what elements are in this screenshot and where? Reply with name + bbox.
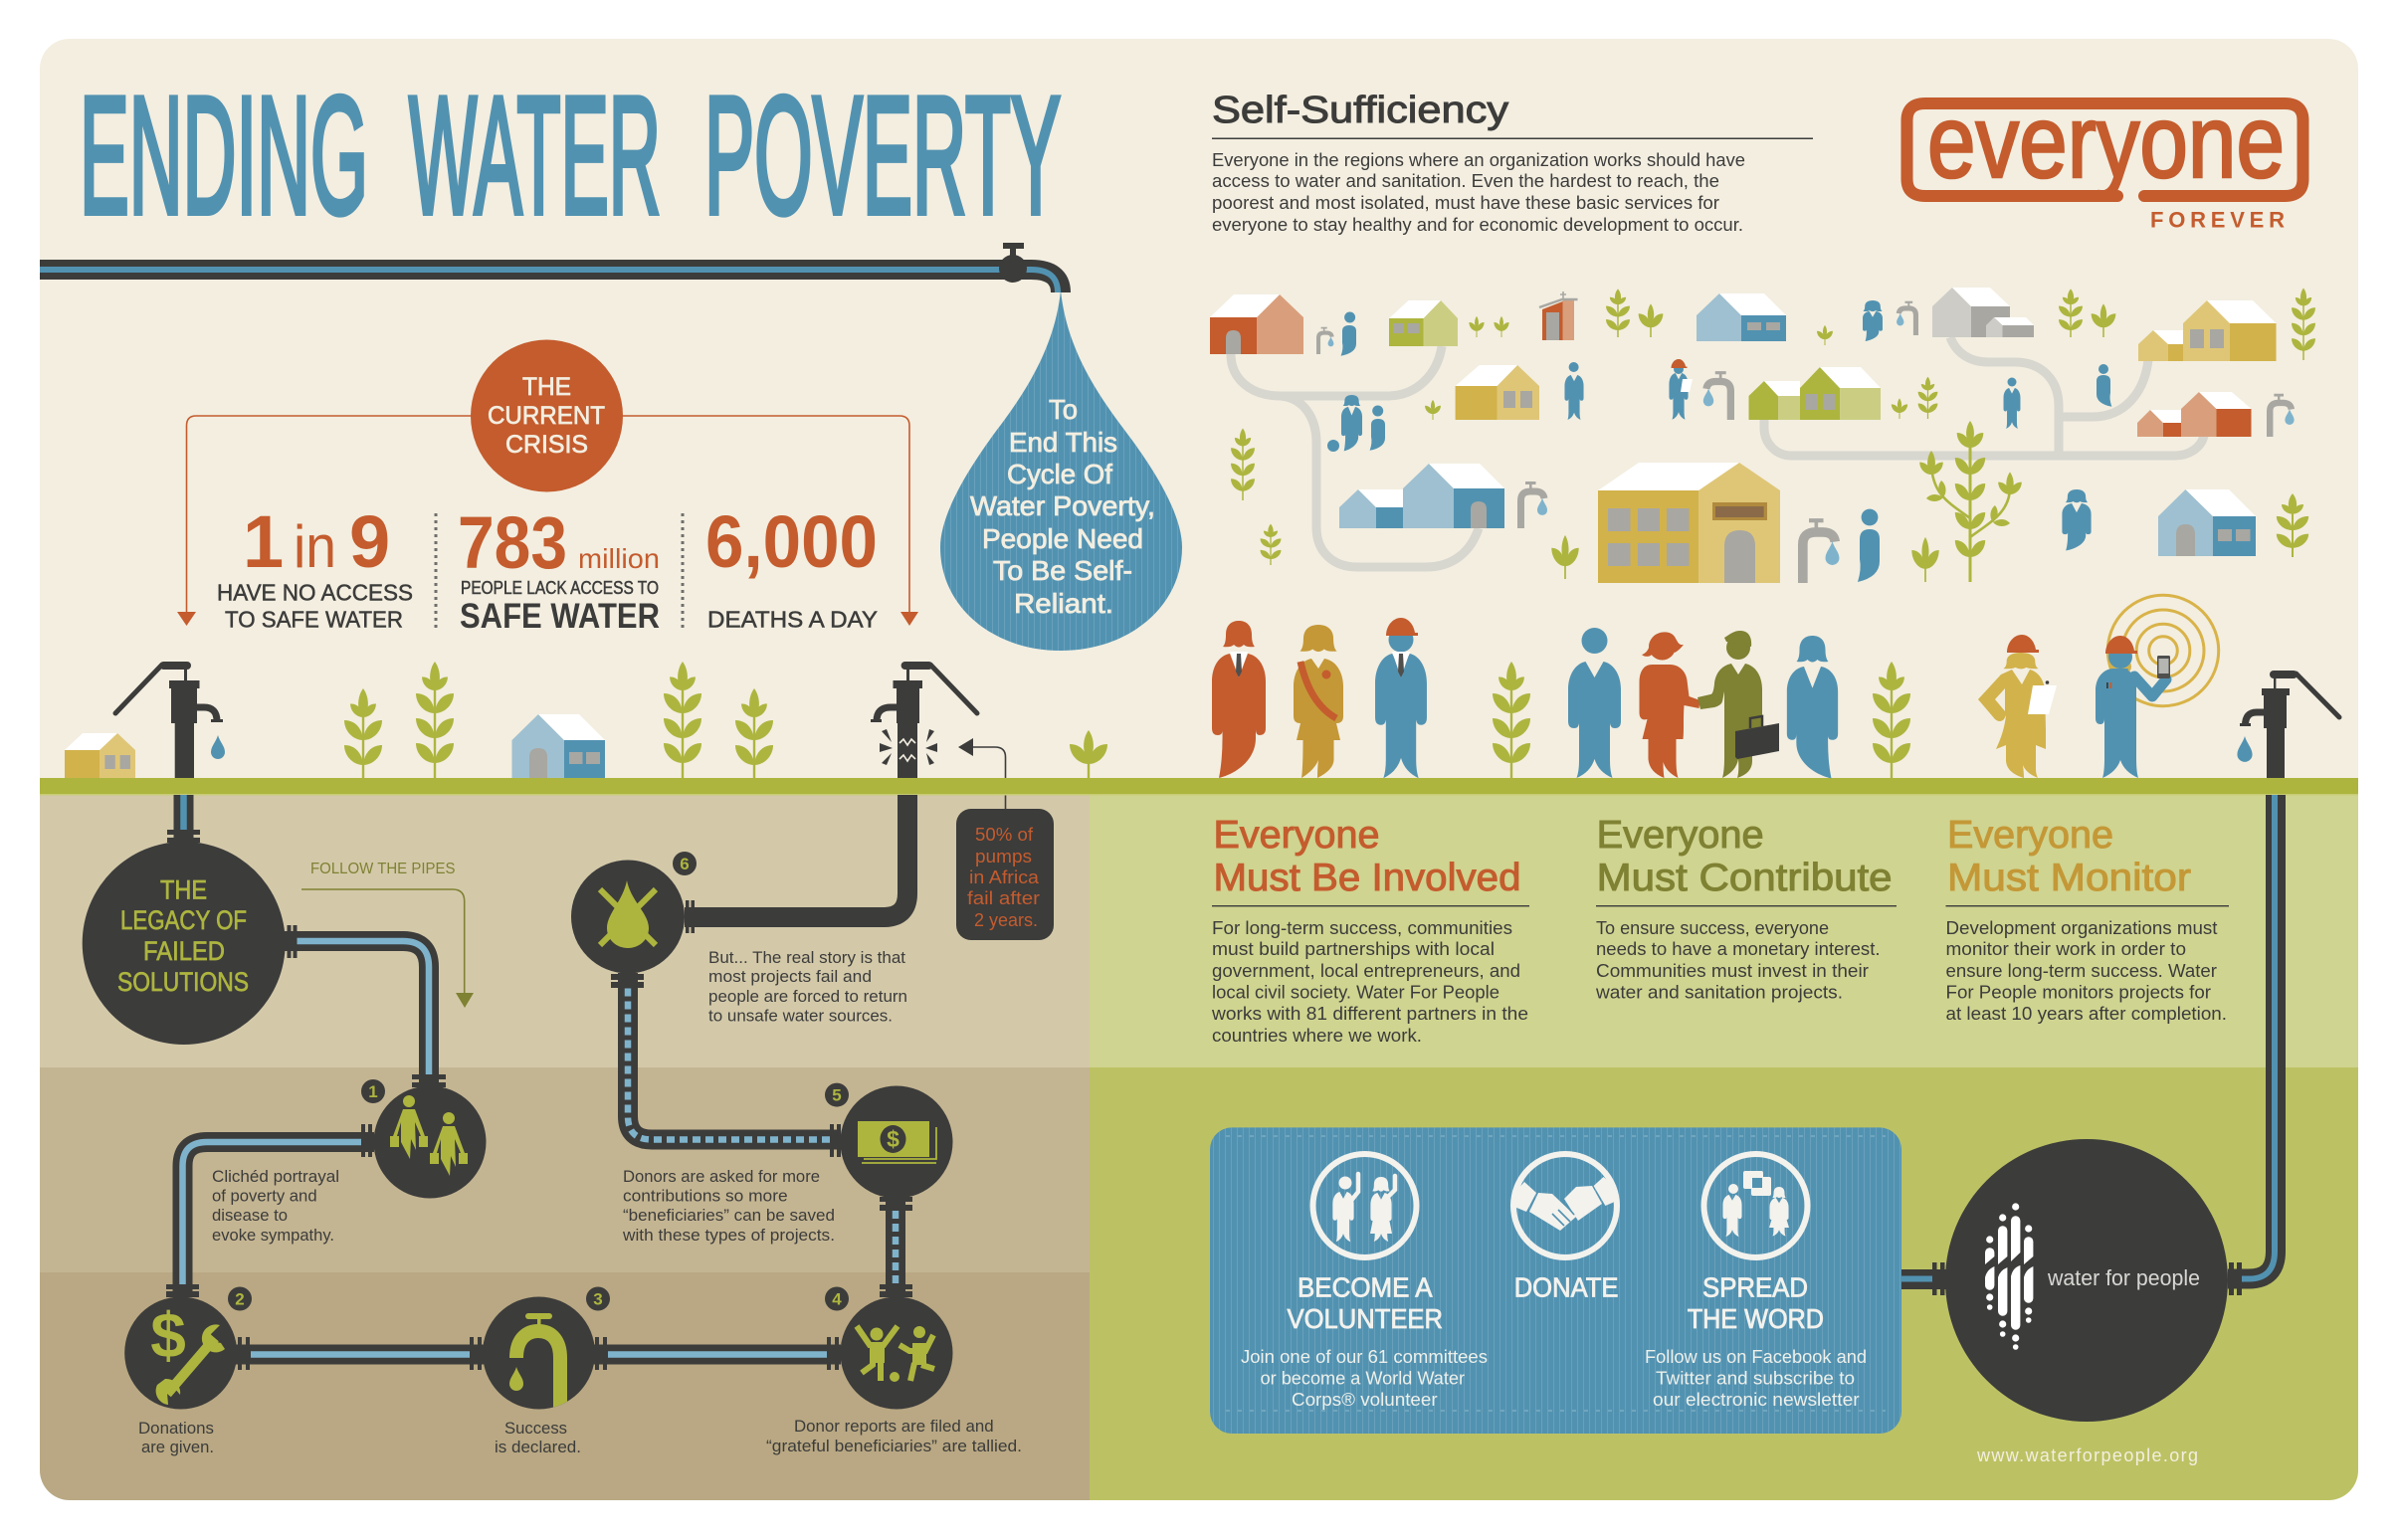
current crisis badge: CRISIS — [505, 431, 588, 459]
text: volunteer details: Join one of our 61 committees — [1241, 1347, 1488, 1367]
stat: 783 million: million — [578, 543, 660, 574]
person: inspector with clipboard — [1978, 635, 2057, 778]
column: everyone must monitor: monitor their work in order to — [1946, 939, 2186, 959]
callout: 50% of pumps: 50% of — [975, 825, 1034, 845]
stat: 783 million — [458, 501, 660, 636]
text: volunteer details — [1241, 1347, 1488, 1410]
title — [80, 62, 1061, 249]
icon: volunteer ring — [1313, 1154, 1417, 1257]
follow the pipes label with arrow — [301, 861, 474, 1008]
caption: step 6 — [708, 948, 907, 1026]
caption: step 5: Donors are asked for more — [623, 1167, 820, 1186]
column: everyone must monitor: Everyone — [1947, 814, 2113, 857]
heading: spread the word: SPREAD — [1702, 1272, 1808, 1303]
plants: left group — [344, 662, 1107, 778]
water drop callout: Water Poverty, — [970, 490, 1155, 521]
hub: legacy of failed solutions — [83, 842, 286, 1045]
column: everyone must be involved: For long-term success, communities — [1212, 918, 1512, 938]
column: everyone must be involved — [1211, 814, 1529, 1046]
houses: grey — [1932, 288, 2034, 337]
column: everyone must be involved: works with 81 different partners in the — [1211, 1004, 1528, 1024]
signal rings — [2107, 595, 2219, 706]
column: everyone must contribute: water and sanitation projects. — [1595, 983, 1843, 1003]
follow the pipes label with arrow: FOLLOW THE PIPES — [310, 861, 456, 877]
caption: step 6: most projects fail and — [708, 967, 872, 986]
step 3: success tap: 3 — [593, 1289, 603, 1309]
text: self-sufficiency paragraph: poorest and most isolated, must have these basic services for — [1212, 193, 1719, 213]
stat: 1 in 9: HAVE NO ACCESS — [217, 579, 413, 605]
text: spread the word details: Twitter and subscribe to — [1656, 1369, 1855, 1389]
water drop callout: Reliant. — [1014, 588, 1113, 619]
handshake: woman and man with briefcase — [1640, 631, 1779, 778]
top water pipe with valve — [40, 243, 1061, 292]
heading: donate: DONATE — [1514, 1272, 1618, 1303]
column: everyone must monitor — [1946, 814, 2229, 1024]
text: spread the word details: our electronic newsletter — [1653, 1390, 1860, 1410]
logo: everyone forever — [1906, 85, 2302, 233]
column: everyone must contribute: needs to have a monetary interest. — [1596, 939, 1881, 959]
current crisis badge: CURRENT — [488, 402, 605, 430]
working pump with water drop — [115, 662, 225, 778]
hub: legacy of failed solutions: LEGACY OF — [120, 905, 247, 935]
village taps — [1318, 301, 2295, 583]
person: woman in suit — [1212, 621, 1266, 778]
step 2: donations — [124, 1287, 252, 1409]
caption: step 2: Donations — [138, 1419, 214, 1438]
village water lines — [1231, 337, 2204, 567]
step 5: more contributions: 5 — [832, 1086, 842, 1105]
water drop callout: End This — [1009, 427, 1117, 458]
column: everyone must monitor: For People monitors projects for — [1946, 983, 2211, 1003]
caption: step 5: with these types of projects. — [622, 1226, 835, 1245]
heading: become a volunteer — [1288, 1272, 1443, 1334]
step 4: grateful beneficiaries — [825, 1287, 953, 1409]
house: yellow — [1456, 365, 1539, 420]
column: everyone must be involved: Everyone — [1214, 814, 1379, 857]
heading: become a volunteer: VOLUNTEER — [1288, 1303, 1443, 1334]
column: everyone must contribute: To ensure success, everyone — [1596, 918, 1829, 938]
caption: step 1: disease to — [212, 1206, 288, 1225]
heading: become a volunteer: BECOME A — [1298, 1272, 1433, 1303]
caption: step 5 — [622, 1167, 835, 1245]
caption: step 1: of poverty and — [212, 1186, 317, 1206]
broken pump — [871, 662, 977, 778]
step 4: grateful beneficiaries: 4 — [832, 1289, 842, 1309]
text: spread the word details: Follow us on Facebook and — [1645, 1347, 1867, 1367]
text: self-sufficiency paragraph — [1212, 150, 1745, 235]
stat: 1 in 9: in — [294, 513, 336, 580]
callout: 50% of pumps: pumps — [975, 847, 1032, 866]
hub: legacy of failed solutions: FAILED — [143, 936, 225, 966]
caption: step 3: is declared. — [495, 1438, 581, 1456]
text: self-sufficiency paragraph: access to water and sanitation. Even the hardest to reach, the — [1212, 171, 1719, 191]
houses: red right — [2137, 392, 2251, 437]
column: everyone must monitor: ensure long-term success. Water — [1946, 961, 2217, 981]
right pipe to water for people hub — [1901, 795, 2276, 1279]
caption: step 5: contributions so more — [623, 1186, 788, 1206]
plant: people row — [1493, 662, 1910, 778]
houses: blue duplex — [1339, 464, 1504, 528]
website url: www.waterforpeople.org — [1976, 1445, 2198, 1465]
stat: 1 in 9 — [217, 500, 413, 633]
panel: take action — [1210, 1127, 1901, 1434]
water drop callout: People Need — [982, 523, 1143, 554]
column: everyone must be involved: local civil society. Water For People — [1212, 983, 1499, 1003]
step 6: failed water drop — [571, 852, 697, 973]
column: everyone must be involved: government, local entrepreneurs, and — [1212, 961, 1520, 981]
stat: 1 in 9: 9 — [349, 500, 390, 583]
person: monitor with phone — [2096, 636, 2170, 778]
village plants — [1231, 288, 2315, 582]
logo: everyone forever: everyone — [1927, 85, 2285, 200]
column: everyone must contribute — [1595, 814, 1897, 1003]
caption: step 2: are given. — [141, 1438, 214, 1456]
stat: 6,000: 6,000 — [705, 500, 878, 583]
callout: 50% of pumps: fail after — [967, 888, 1040, 908]
caption: step 1: Clichéd portrayal — [212, 1167, 339, 1186]
icon: spread the word ring — [1703, 1154, 1807, 1257]
person: man with helmet and tie — [1375, 618, 1427, 778]
step 3: success tap — [483, 1287, 610, 1413]
hub: water for people logo — [1932, 1139, 2242, 1422]
house: red — [1210, 294, 1303, 354]
person: man — [1568, 628, 1621, 778]
right pump with water drop — [2237, 671, 2339, 778]
water drop callout: To — [1049, 394, 1078, 425]
text: volunteer details: or become a World Water — [1261, 1369, 1465, 1389]
title: ENDING — [80, 62, 368, 249]
text: POVERTY — [704, 62, 1061, 249]
pipe flanges — [166, 830, 912, 1370]
house: light blue — [1697, 293, 1786, 341]
caption: step 3 — [495, 1419, 581, 1456]
callout: 50% of pumps: 2 years. — [974, 910, 1038, 930]
big branching tree — [1919, 421, 2022, 582]
column: everyone must contribute: Everyone — [1597, 814, 1764, 857]
stat: 783 million: 783 — [458, 501, 567, 584]
caption: step 1 — [212, 1167, 339, 1245]
hub: legacy of failed solutions: THE — [160, 875, 207, 905]
person: woman with sash — [1294, 625, 1343, 778]
column: everyone must monitor: Development organizations must — [1946, 918, 2217, 938]
stat: 1 in 9: TO SAFE WATER — [225, 607, 403, 633]
callout: 50% of pumps — [956, 809, 1054, 940]
current crisis badge — [471, 340, 623, 491]
houses: yellow right — [2138, 300, 2277, 361]
caption: step 3: Success — [504, 1419, 567, 1438]
caption: step 6: to unsafe water sources. — [708, 1007, 893, 1026]
text: spread the word details — [1645, 1347, 1867, 1410]
ground strip — [40, 778, 2358, 796]
house: blue right — [2158, 489, 2256, 556]
step 6: failed water drop: 6 — [680, 855, 690, 873]
stat: 6,000 — [705, 500, 878, 633]
logo: everyone forever: FOREVER — [2150, 208, 2285, 233]
caption: step 5: “beneficiaries” can be saved — [623, 1206, 835, 1225]
step 5: more contributions: $ — [887, 1126, 899, 1152]
column: everyone must contribute: Communities must invest in their — [1596, 961, 1869, 981]
current crisis bracket with arrows — [177, 416, 918, 626]
caption: step 4 — [766, 1417, 1022, 1455]
pipe network: failed solutions — [183, 795, 907, 1355]
step 2: donations: 2 — [235, 1289, 245, 1309]
latrine — [1539, 291, 1578, 340]
heading: self-sufficiency: Self-Sufficiency — [1212, 90, 1508, 131]
stat: 783 million: PEOPLE LACK ACCESS TO — [461, 578, 659, 598]
text: volunteer details: Corps® volunteer — [1292, 1390, 1438, 1410]
caption: step 4: Donor reports are filed and — [794, 1417, 994, 1436]
column: everyone must monitor: Must Monitor — [1947, 857, 2191, 899]
house: blue — [511, 714, 605, 778]
heading: spread the word: THE WORD — [1688, 1303, 1824, 1334]
caption: step 6: But... The real story is that — [708, 948, 905, 967]
column: everyone must be involved: countries where we work. — [1212, 1026, 1422, 1046]
stat: 1 in 9: 1 — [243, 500, 284, 583]
callout: 50% of pumps: in Africa — [969, 867, 1040, 887]
caption: step 6: people are forced to return — [708, 987, 907, 1006]
houses: green duplex — [1749, 367, 1881, 420]
text: self-sufficiency paragraph: Everyone in the regions where an organization works should have — [1212, 150, 1745, 170]
title: WATER — [409, 62, 661, 249]
column: everyone must contribute: Must Contribute — [1597, 857, 1893, 899]
text: self-sufficiency paragraph: everyone to stay healthy and for economic development to occur. — [1212, 215, 1743, 235]
stat dividers — [436, 513, 683, 630]
step 2: donations: $ — [150, 1299, 186, 1371]
caption: step 1: evoke sympathy. — [212, 1226, 334, 1245]
person: woman in blue — [1787, 636, 1838, 778]
step 1: cliched portrayal — [361, 1079, 486, 1198]
building: school — [1598, 463, 1780, 583]
stat: 6,000: DEATHS A DAY — [707, 607, 878, 633]
arrow to broken pump — [958, 738, 1005, 811]
water drop callout: Cycle Of — [1007, 459, 1112, 489]
village people — [1327, 300, 2111, 582]
column: everyone must monitor: at least 10 years after completion. — [1946, 1004, 2227, 1024]
house: small yellow — [65, 733, 135, 778]
hub: water for people logo: water for people — [2047, 1265, 2200, 1290]
caption: step 4: “grateful beneficiaries” are tallied. — [766, 1437, 1022, 1455]
house: green — [1389, 300, 1458, 346]
caption: step 2 — [138, 1419, 214, 1456]
heading: spread the word — [1688, 1272, 1824, 1334]
water drop callout: To Be Self- — [993, 555, 1132, 586]
column: everyone must be involved: must build partnerships with local — [1212, 939, 1495, 959]
stat: 783 million: SAFE WATER — [460, 597, 660, 636]
step 1: cliched portrayal: 1 — [368, 1082, 378, 1101]
column: everyone must be involved: Must Be Involved — [1214, 857, 1520, 899]
hub: legacy of failed solutions: SOLUTIONS — [117, 967, 249, 997]
water drop callout — [940, 290, 1182, 651]
step 5: more contributions — [825, 1083, 953, 1198]
icon: handshake ring — [1513, 1154, 1617, 1257]
current crisis badge: THE — [522, 373, 571, 401]
